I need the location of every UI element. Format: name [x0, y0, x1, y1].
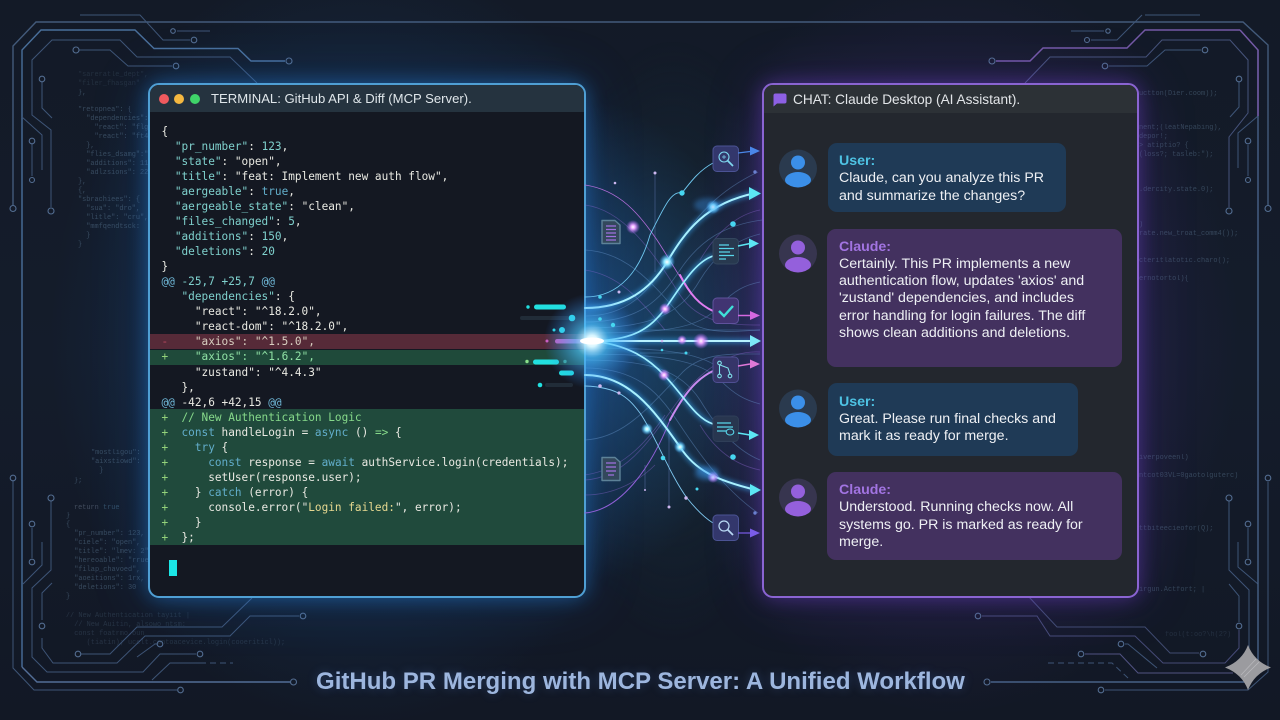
message text: Claude 2: Claude:: [839, 482, 891, 498]
background code: right side: iverpoveenl): [1139, 454, 1189, 462]
chat header bar: [764, 85, 1137, 113]
terminal code: { "pr_number": 123, "state": "open", "title": "feat: Implement new auth flow", "aergeable": true, "aergeable_state": "clean", "files_changed": 5, "additions": 150, "deletions": 20 } @@ -25,7 +25,7 @@ "dependencies": { "react": "^18.2.0", "react-dom": "^18.2.0", - "axios": "^1.5.0", + "axios": "^1.6.2", "zustand": "^4.4.3" }, @@ -42,6 +42,15 @@ + // New Authentication Logic + const handleLogin = async () => { + try { + const response = await authService.login(credentials); + setUser(response.user); + } catch (error) { + console.error("Login failed:", error); + } + };: [162, 124, 568, 544]
arrow: cyan document: [738, 238, 759, 248]
avatar: user: [779, 150, 817, 188]
background code: left side: "sareratle_dept", "filer_fhasgan": [78, 71, 148, 88]
terminal data streaks: [520, 304, 587, 387]
glowing nodes: [598, 170, 757, 515]
avatar: Claude: [779, 234, 817, 272]
title: GitHub PR Merging with MCP Server: A Unified Workflow: [316, 668, 965, 695]
bubble: [828, 383, 1078, 456]
message text: user 2: [839, 394, 1056, 444]
bubble: [828, 143, 1066, 212]
background code: right side: nent;(leatNepabing), depor!; > atiptio? { (loss?; tasleb:");: [1139, 124, 1222, 159]
central connector backdrop: [585, 40, 762, 640]
background code: left side: "retopnea": { "dependencies": { "react": "flg", "react": "ft4", }, "flies_dsamg":"", "additions": 11, "adlzsions": 22, }, {, "sbrachiees": { "sua": "dro", "litle": "cru", "mmfqendtsck: } }: [78, 106, 157, 249]
arrow: large cyan upper: [749, 187, 761, 200]
message text: user 1: [839, 153, 1044, 204]
message text: Claude 1: Certainly. This PR implements a new authentication flow, updates 'axios' and 'zustand' dependencies, and includes error handling for login failures. The diff shows clean additions and deletions.: [839, 256, 1085, 341]
background code: left side: "mostligou": "aixstiowd": }: [91, 449, 141, 475]
background code: right side: ttbiteecieofor(Q);: [1139, 525, 1213, 533]
arrow: cyan comment: [738, 430, 759, 440]
icon: magnifier with plus: [713, 146, 738, 172]
arrow: central cyan: [750, 335, 761, 347]
diff band: removed line: [150, 334, 584, 349]
message text: user 2: Great. Please run final checks and mark it as ready for merge.: [839, 411, 1056, 444]
background code: right side: ernotortol){: [1139, 275, 1189, 283]
icon: document top: [602, 220, 620, 244]
avatar: Claude: [779, 478, 817, 516]
chat header bar: CHAT: Claude Desktop (AI Assistant).: [793, 92, 1020, 107]
icon: document bottom: [602, 458, 620, 480]
terminal header bar: TERMINAL: GitHub API & Diff (MCP Server).: [211, 91, 472, 106]
icon: comment lines: [713, 416, 738, 442]
message text: user 1: User:: [839, 153, 875, 169]
icon: sparkle watermark: [1225, 645, 1271, 690]
background code: left side: },: [78, 89, 86, 97]
arrow: purple to chat: [738, 528, 760, 538]
avatar: user: [779, 390, 817, 428]
text: // New Authentication tayiit | // New Auitin, alsowo ntsm: const foatrmo.oun (tiatin); ucelt.contoacevice.login(cooeriticl));: [66, 612, 285, 647]
arrow: pink branch: [738, 360, 760, 368]
arrow: blue to chat: [738, 146, 760, 156]
faint fan lines: [585, 172, 762, 513]
background code: right side: fool(t:oo?\h(2?): [1165, 631, 1231, 639]
icon: magnifier: [713, 515, 738, 540]
background code: right side: ntcot03VL=0gaotolguterc): [1139, 472, 1238, 480]
diff band: added block: [150, 409, 584, 545]
background code: right side: [1139, 90, 1238, 639]
message text: Claude 2: Understood. Running checks now. All systems go. PR is marked as ready for merge.: [839, 499, 1083, 550]
terminal header bar: [150, 85, 584, 112]
background code: left side: } { "pr_number": 123, "ciele": "open", "title": "lmev: 2", "hereoable": "rrue", "filap_chavoed", "aoeitions": 1rx, "deletions": 30 }: [66, 512, 157, 601]
panel: terminal: [148, 83, 586, 598]
background code: right side: cteritlatotic.charo();: [1139, 257, 1230, 265]
message text: user 2: User:: [839, 394, 875, 410]
diff band: added line: [150, 350, 584, 364]
streams: [585, 163, 756, 523]
chat message 1: user: [779, 143, 1066, 212]
chat message 3: user: [779, 383, 1078, 456]
message text: user 1: Claude, can you analyze this PR and summarize the changes?: [839, 170, 1044, 204]
arrow: large cyan lower: [750, 484, 761, 496]
bubble: [827, 229, 1122, 367]
arrow: pink check: [738, 311, 760, 320]
icon: check: [713, 298, 738, 324]
icon: branch merge: [713, 357, 738, 382]
background code: right side: ) rate.new_troat_comm4());: [1139, 221, 1238, 238]
bubble: [827, 472, 1122, 560]
icon: chat bubble: [774, 94, 786, 106]
background code: right side: .dercity.state.0);: [1139, 186, 1213, 194]
background code: left side: return true: [74, 504, 120, 512]
chat message 4: Claude: [779, 472, 1122, 560]
background code: left side: [66, 71, 285, 647]
background code: right side: irgun.Actfort; |: [1139, 586, 1205, 594]
icon: text lines: [713, 238, 738, 264]
bright stream glow: [585, 193, 756, 490]
central glow node: [544, 293, 640, 389]
background code: right side: uctton(Dier.coom));: [1139, 90, 1218, 98]
message text: Claude 1: Claude:: [839, 238, 891, 254]
chat message 2: Claude: [779, 229, 1122, 367]
panel: chat: [762, 83, 1139, 598]
background code: left side: };: [74, 477, 82, 485]
terminal cursor: [168, 560, 176, 576]
